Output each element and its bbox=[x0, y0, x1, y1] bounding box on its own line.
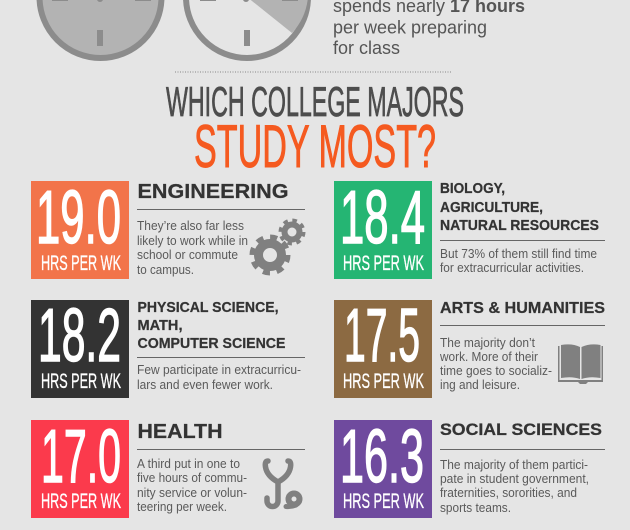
text: biology description bbox=[440, 247, 597, 275]
heading: arts and humanities: ARTS & HUMANITIES bbox=[440, 300, 605, 317]
text: health description: teering per week. bbox=[137, 500, 227, 514]
heading: engineering: ENGINEERING bbox=[138, 181, 288, 203]
text: arts description: The majority don’t bbox=[440, 336, 535, 350]
panel: social sciences bbox=[334, 414, 605, 518]
panel: physical science bbox=[31, 293, 305, 398]
panel: health bbox=[31, 414, 305, 518]
text: social sciences description bbox=[440, 458, 589, 515]
heading: physical science, math, computer science bbox=[138, 300, 286, 352]
text: physical science description: lars and even fewer work. bbox=[137, 378, 273, 392]
icon: partial clock bbox=[186, 0, 308, 58]
text: social sciences description: fraternities, sororities, and bbox=[440, 486, 577, 500]
heading: physical science, math, computer science: PHYSICAL SCIENCE, bbox=[138, 300, 278, 316]
text: hours preparing for class bbox=[333, 0, 525, 58]
stat box: 17.0 bbox=[31, 414, 129, 518]
panel: engineering bbox=[31, 175, 305, 279]
text: biology description: for extracurricular activities. bbox=[440, 261, 584, 275]
heading: biology, agriculture, natural resources: AGRICULTURE, bbox=[440, 200, 543, 216]
text: arts description: work. More of their bbox=[439, 350, 538, 364]
icon: stethoscope bbox=[265, 461, 300, 507]
text: arts description: ing and leisure. bbox=[440, 378, 520, 392]
stat box: 19.0: HRS PER WK bbox=[41, 251, 121, 275]
panel: biology bbox=[334, 175, 605, 279]
text: hours preparing for class: per week preparing bbox=[333, 18, 487, 38]
text: engineering description: likely to work while in bbox=[137, 234, 248, 248]
stat box: 18.2: 18.2 bbox=[38, 293, 121, 377]
text: physical science description: Few participate in extracurricu- bbox=[137, 363, 301, 377]
heading: physical science, math, computer science: MATH, bbox=[138, 318, 182, 334]
text: arts description bbox=[439, 336, 552, 392]
panel: arts and humanities bbox=[334, 293, 605, 398]
stat box: 16.3: 16.3 bbox=[340, 414, 424, 498]
stat box: 17.5: HRS PER WK bbox=[343, 369, 424, 393]
stat box: 19.0 bbox=[31, 175, 129, 279]
heading: study most: STUDY MOST? bbox=[194, 113, 436, 180]
text: engineering description bbox=[137, 219, 248, 277]
stat box: 17.0: HRS PER WK bbox=[41, 489, 121, 513]
text: health description: nity service or volun- bbox=[137, 486, 247, 500]
heading: physical science, math, computer science: COMPUTER SCIENCE bbox=[138, 336, 286, 352]
stat box: 18.2: HRS PER WK bbox=[41, 369, 121, 393]
stat box: 18.4: 18.4 bbox=[340, 175, 425, 259]
stat box: 18.4: HRS PER WK bbox=[343, 251, 424, 275]
heading: biology, agriculture, natural resources bbox=[440, 181, 599, 234]
stat box: 19.0: 19.0 bbox=[36, 175, 121, 259]
text: social sciences description: The majority of them partici- bbox=[440, 458, 588, 472]
heading: biology, agriculture, natural resources: BIOLOGY, bbox=[440, 181, 505, 197]
icon: open book bbox=[558, 344, 603, 384]
stat box: 16.3: HRS PER WK bbox=[343, 489, 424, 513]
text: health description: five hours of commu- bbox=[137, 471, 247, 485]
text: health description bbox=[137, 457, 247, 514]
text: biology description: But 73% of them still find time bbox=[440, 247, 597, 261]
stat box: 16.3 bbox=[334, 414, 432, 518]
heading: social sciences: SOCIAL SCIENCES bbox=[440, 421, 602, 439]
heading: biology, agriculture, natural resources: NATURAL RESOURCES bbox=[440, 218, 599, 234]
text: hours preparing for class: for class bbox=[333, 38, 400, 58]
text: engineering description: to campus. bbox=[137, 263, 194, 277]
text: engineering description: school or commute bbox=[137, 248, 238, 262]
stat box: 18.4 bbox=[334, 175, 432, 279]
icon: full clock bbox=[40, 0, 162, 58]
stat box: 17.0: 17.0 bbox=[41, 414, 121, 498]
icon: gears bbox=[252, 220, 304, 272]
stat box: 17.5: 17.5 bbox=[344, 293, 420, 377]
text: physical science description bbox=[137, 363, 301, 392]
text: social sciences description: sports teams. bbox=[440, 501, 511, 515]
text: health description: A third put in one to bbox=[137, 457, 240, 471]
text: arts description: time goes to socializ- bbox=[440, 364, 552, 378]
heading: health: HEALTH bbox=[138, 420, 222, 443]
text: social sciences description: pate in student government, bbox=[440, 472, 589, 486]
stat box: 17.5 bbox=[334, 293, 432, 398]
stat box: 18.2 bbox=[31, 293, 129, 398]
text: engineering description: They’re also far less bbox=[137, 219, 244, 233]
